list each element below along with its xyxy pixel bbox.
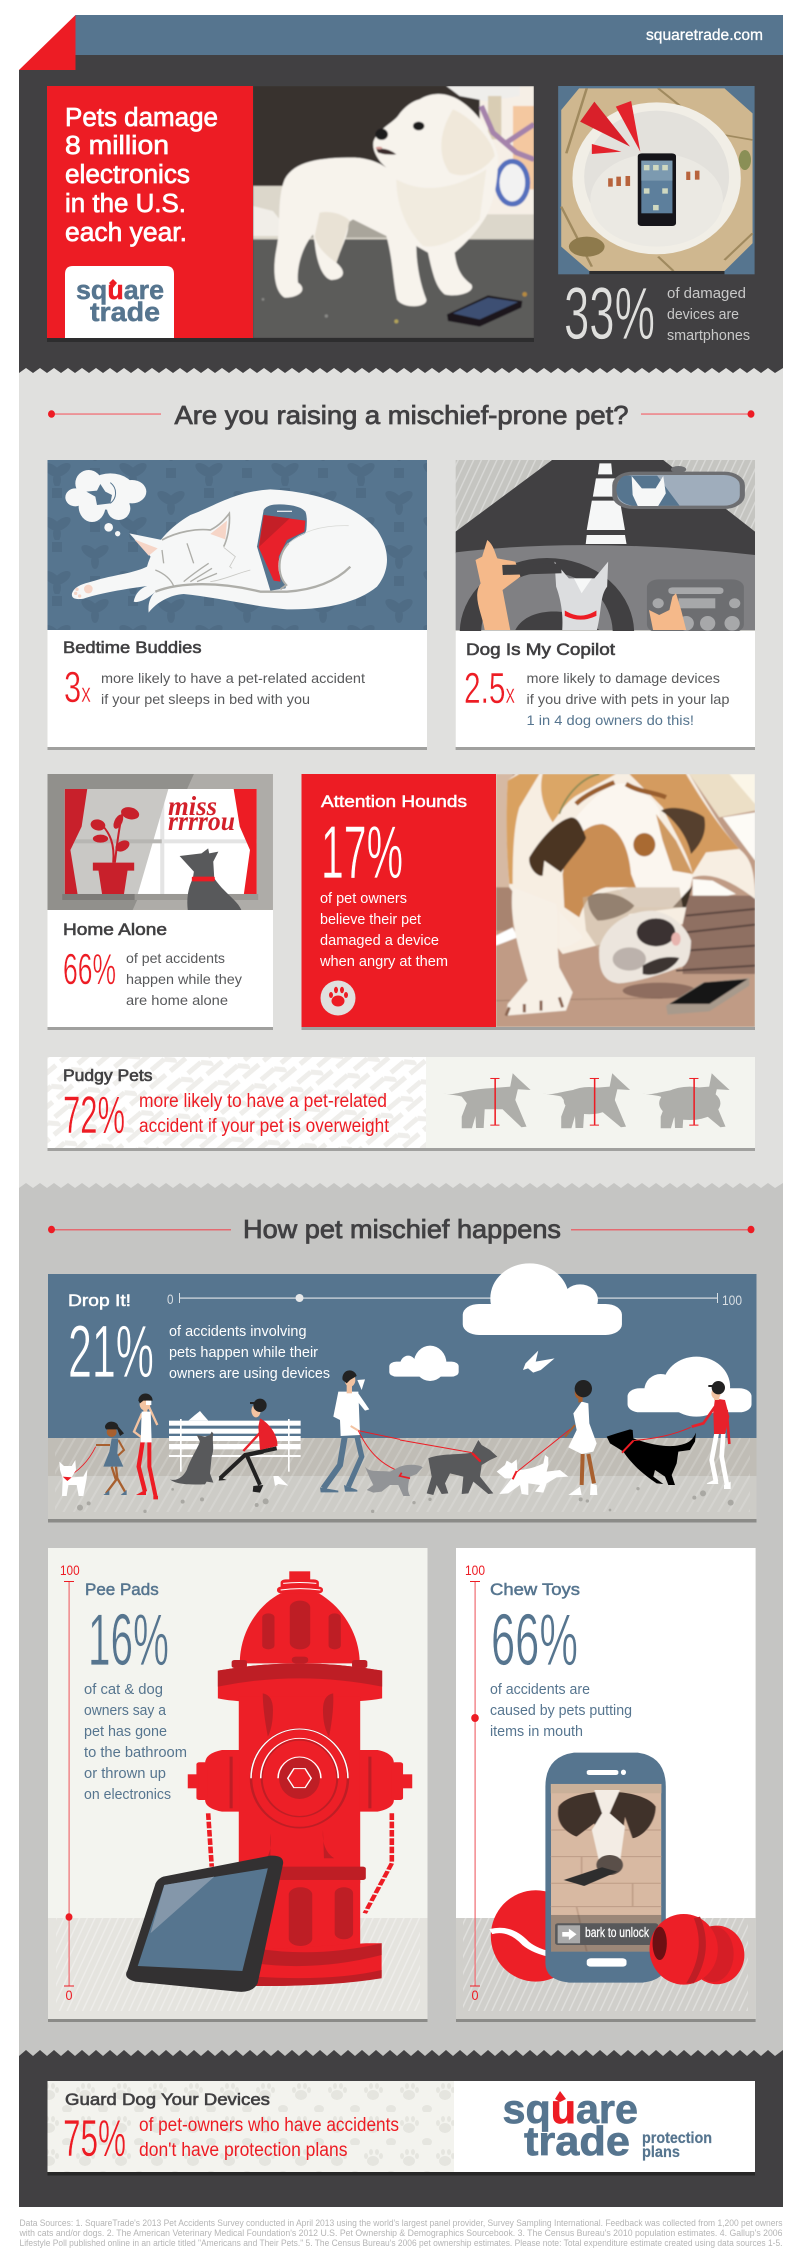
description: are home alone [126, 992, 228, 1008]
hero headline: in the U.S. [65, 190, 186, 218]
description: or thrown up [84, 1766, 166, 1782]
leg and paws [559, 911, 583, 948]
stat description [667, 285, 750, 344]
window decal text [168, 796, 234, 830]
phone [666, 978, 749, 1015]
stat: 16%: 16% [88, 1600, 169, 1681]
panel: hero [47, 86, 534, 342]
icon: paw badge [320, 980, 356, 1016]
description: of cat & dog [84, 1682, 163, 1698]
man on bench [219, 1399, 277, 1493]
card title: Drop It! [68, 1292, 131, 1310]
panel: chew toys [456, 1548, 756, 2022]
panel: attention hounds [302, 774, 755, 1030]
dog: overweight [642, 1073, 730, 1128]
panel: smartphone stat [558, 86, 755, 355]
zigzag edge three [19, 2050, 783, 2057]
tablet [126, 1856, 283, 1992]
description [169, 1324, 330, 1382]
woman on phone [134, 1393, 158, 1499]
illustration: phone and chew toys [491, 1753, 744, 1985]
squaretrade protection plans logo [502, 2086, 712, 2164]
man in red [692, 1381, 731, 1489]
vertical scale [60, 1562, 80, 2003]
description: 1 in 4 dog owners do this! [526, 712, 694, 728]
description: of accidents are [490, 1682, 590, 1698]
vertical scale: 100 [465, 1562, 485, 1578]
illustration: window with waiting cat [47, 774, 273, 910]
header band [76, 15, 783, 55]
description: pet has gone [84, 1724, 167, 1740]
eyes and muzzle [588, 893, 634, 921]
red toy [649, 1914, 744, 1985]
bench [169, 1411, 301, 1472]
description: caused by pets putting [490, 1703, 632, 1719]
chart: three dog silhouettes with measure [443, 1073, 730, 1128]
description: happen while they [126, 971, 242, 987]
description: on electronics [84, 1787, 171, 1803]
photo: bulldog sniffing phone [496, 774, 755, 1027]
data sources footnote [19, 2218, 783, 2248]
hero headline: Pets damage [65, 104, 218, 132]
hero headline: electronics [65, 161, 190, 189]
hero headline [65, 104, 218, 247]
squaretrade logo badge: square [76, 275, 164, 305]
white dog [497, 1455, 568, 1495]
squaretrade logo badge: trade [90, 297, 160, 327]
panel: dog is my copilot [456, 460, 755, 750]
dog: slim [443, 1073, 531, 1128]
photo: phone in water bowl [558, 86, 755, 274]
panel: drop it [48, 1263, 756, 1522]
description: if your pet sleeps in bed with you [101, 691, 310, 707]
description [526, 670, 730, 728]
squaretrade logo badge [65, 266, 174, 338]
heading: how pet mischief happens: How pet mischief happens [243, 1214, 561, 1244]
stat description: devices are [667, 306, 739, 323]
card title: Home Alone [63, 921, 167, 939]
squaretrade protection plans logo: trade [524, 2118, 630, 2164]
card title: Dog Is My Copilot [466, 641, 615, 659]
hero headline: 8 million [65, 132, 169, 160]
illustration: driving with dog [456, 460, 755, 631]
stat: 3x: 3x [64, 663, 91, 712]
small grey dog [365, 1465, 423, 1496]
description [101, 670, 365, 707]
description [139, 2115, 399, 2161]
woman in white dress [565, 1380, 597, 1495]
clouds and bird [389, 1263, 752, 1417]
data sources footnote: Lifestyle Poll published online in an article titled "Americans and Their Pets." 5. The Census Bureau's 2006 pet ownership estimates. Please note: Total expenditure estimate created using data sources 1-5. [20, 2238, 782, 2248]
description: of accidents involving [169, 1324, 306, 1340]
red folded corner [19, 15, 76, 70]
panel: guard dog [48, 2081, 755, 2176]
red ball [491, 1890, 581, 1982]
description: owners are using devices [169, 1366, 330, 1382]
description [490, 1682, 632, 1740]
people and dogs, left half [59, 1370, 400, 1513]
stat: 17%: 17% [321, 810, 403, 894]
window decal text: rrrrou [168, 806, 235, 836]
chihuahua [59, 1447, 96, 1496]
description: to the bathroom [84, 1745, 187, 1761]
stat: 33%: 33% [564, 272, 655, 355]
hind leg [278, 534, 305, 584]
stat: 66%: 66% [491, 1600, 578, 1681]
description: of pet owners [320, 891, 407, 907]
panel: bedtime buddies [48, 460, 427, 750]
description: believe their pet [320, 912, 421, 928]
scale 0 to 100 [167, 1291, 742, 1308]
zigzag edge two [19, 1183, 783, 1189]
stat: 75%: 75% [63, 2110, 126, 2168]
bottom dark section background [19, 2056, 783, 2207]
stat: 2.5x: 2.5x [464, 664, 515, 713]
description: if you drive with pets in your lap [526, 691, 730, 707]
hero red block [47, 86, 253, 338]
girl [96, 1422, 127, 1495]
scale 0 to 100: 0 [167, 1291, 174, 1307]
scale 0 to 100: 100 [722, 1292, 742, 1308]
hydrant [188, 1571, 412, 1986]
card title: Pee Pads [85, 1581, 159, 1599]
window decal text: miss [168, 791, 217, 821]
man with phone [320, 1370, 400, 1492]
black dog [607, 1429, 696, 1485]
stat: 21%: 21% [68, 1310, 154, 1393]
description: accident if your pet is overweight [139, 1116, 390, 1137]
phone caption: bark to unlock [585, 1925, 649, 1940]
squaretrade protection plans logo: plans [642, 2144, 680, 2161]
card title: Attention Hounds [321, 793, 467, 811]
ground dots [77, 1488, 374, 1513]
stat: 66%: 66% [63, 945, 116, 994]
dog: medium [542, 1073, 630, 1128]
zigzag edge one [19, 368, 783, 374]
card title: Bedtime Buddies [63, 639, 202, 657]
description: more likely to have a pet-related [139, 1091, 387, 1112]
cat body [72, 489, 387, 613]
description: don't have protection plans [139, 2140, 348, 2161]
panel: home alone [47, 774, 273, 1030]
description [319, 891, 448, 970]
phone [257, 504, 307, 591]
description: items in mouth [490, 1724, 583, 1740]
vertical scale: 0 [472, 1987, 479, 2003]
description: when angry at them [319, 954, 448, 970]
large dark dog [427, 1440, 497, 1495]
data sources footnote: with cats and/or dogs. 2. The American Veterinary Medical Foundation's 2012 U.S. Pet Ownership & Demographics Sourcebook. 3. The Census Bureau's 2010 population estimates. 4. Gallup's 2006 [19, 2228, 783, 2238]
description: more likely to damage devices [526, 670, 720, 686]
photo: white dog with broken phone [253, 86, 534, 338]
ground bird [273, 1476, 288, 1486]
description: of pet-owners who have accidents [139, 2115, 399, 2136]
heading: mischief-prone: Are you raising a mischief-prone pet? [174, 400, 628, 430]
card title: Chew Toys [490, 1581, 580, 1599]
illustration: sleeping cat with phone [48, 460, 427, 630]
description: damaged a device [320, 933, 439, 949]
hero headline: each year. [65, 219, 187, 247]
vertical scale [465, 1562, 485, 2003]
description [126, 950, 242, 1008]
light section background [19, 373, 783, 1188]
description: owners say a [84, 1703, 167, 1719]
card title: Guard Dog Your Devices [65, 2091, 270, 2109]
heading: how pet mischief happens [48, 1214, 754, 1244]
card title: Pudgy Pets [63, 1067, 152, 1085]
description: pets happen while their [169, 1345, 318, 1361]
panel: pudgy pets [48, 1057, 755, 1151]
description: of pet accidents [126, 950, 225, 966]
vertical scale: 100 [60, 1562, 80, 1578]
dark grey section background [19, 1188, 783, 2050]
people and dogs, right half [365, 1380, 734, 1511]
description [139, 1091, 390, 1137]
body [507, 774, 755, 954]
sitting grey dog [170, 1432, 213, 1484]
website address: squaretrade.com [646, 27, 763, 44]
description [84, 1682, 187, 1803]
description: more likely to have a pet-related accident [101, 670, 365, 686]
ears [529, 817, 586, 876]
vertical scale: 0 [66, 1987, 73, 2003]
stat: 72%: 72% [63, 1086, 125, 1145]
squaretrade protection plans logo: square [502, 2086, 638, 2132]
stat description: smartphones [667, 327, 750, 344]
illustration: fire hydrant and tablet [126, 1571, 412, 1992]
thought bubble [65, 470, 146, 536]
phone body [545, 1753, 666, 1983]
rear-view mirror [671, 466, 686, 473]
heading: mischief-prone [48, 400, 754, 430]
squaretrade protection plans logo: protection [642, 2130, 712, 2147]
panel: pee pads [48, 1548, 428, 2022]
stat description: of damaged [667, 285, 746, 302]
dark top panel [19, 55, 783, 370]
data sources footnote: Data Sources: 1. SquareTrade's 2013 Pet Accidents Survey conducted in April 2013 using the world's largest panel provider, Survey Sampling International. Feedback was collected from 1,200 pet owners [20, 2218, 783, 2228]
ground dots [412, 1487, 734, 1511]
